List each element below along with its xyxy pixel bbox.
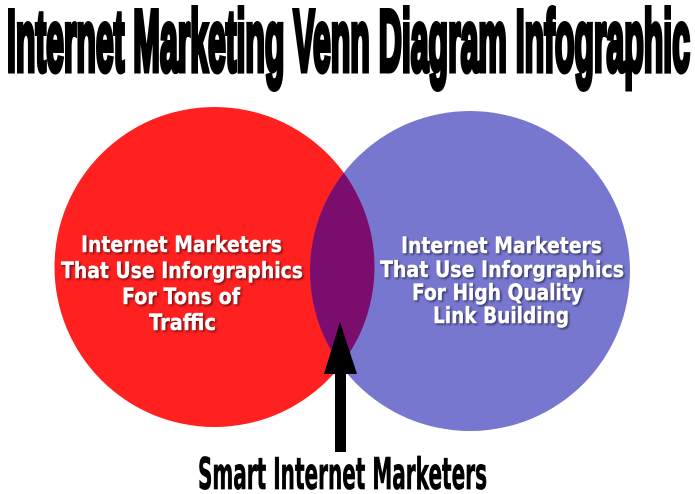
left circle label: That Use Inforgraphics — [61, 258, 303, 284]
left circle label: Internet Marketers — [81, 232, 282, 258]
left circle label: Traffic — [149, 310, 216, 336]
arrow — [324, 322, 357, 452]
red circle — [54, 107, 374, 427]
venn diagram — [54, 107, 630, 431]
right circle label: That Use Inforgraphics — [380, 257, 624, 283]
blue circle — [310, 111, 630, 431]
right circle label: Internet Marketers — [401, 233, 602, 259]
right circle label: For High Quality — [412, 280, 583, 306]
right circle label — [380, 233, 624, 329]
overlap region — [310, 172, 374, 352]
right circle label: Link Building — [433, 303, 569, 329]
left circle label — [61, 232, 303, 336]
left circle label: For Tons of — [122, 284, 240, 310]
